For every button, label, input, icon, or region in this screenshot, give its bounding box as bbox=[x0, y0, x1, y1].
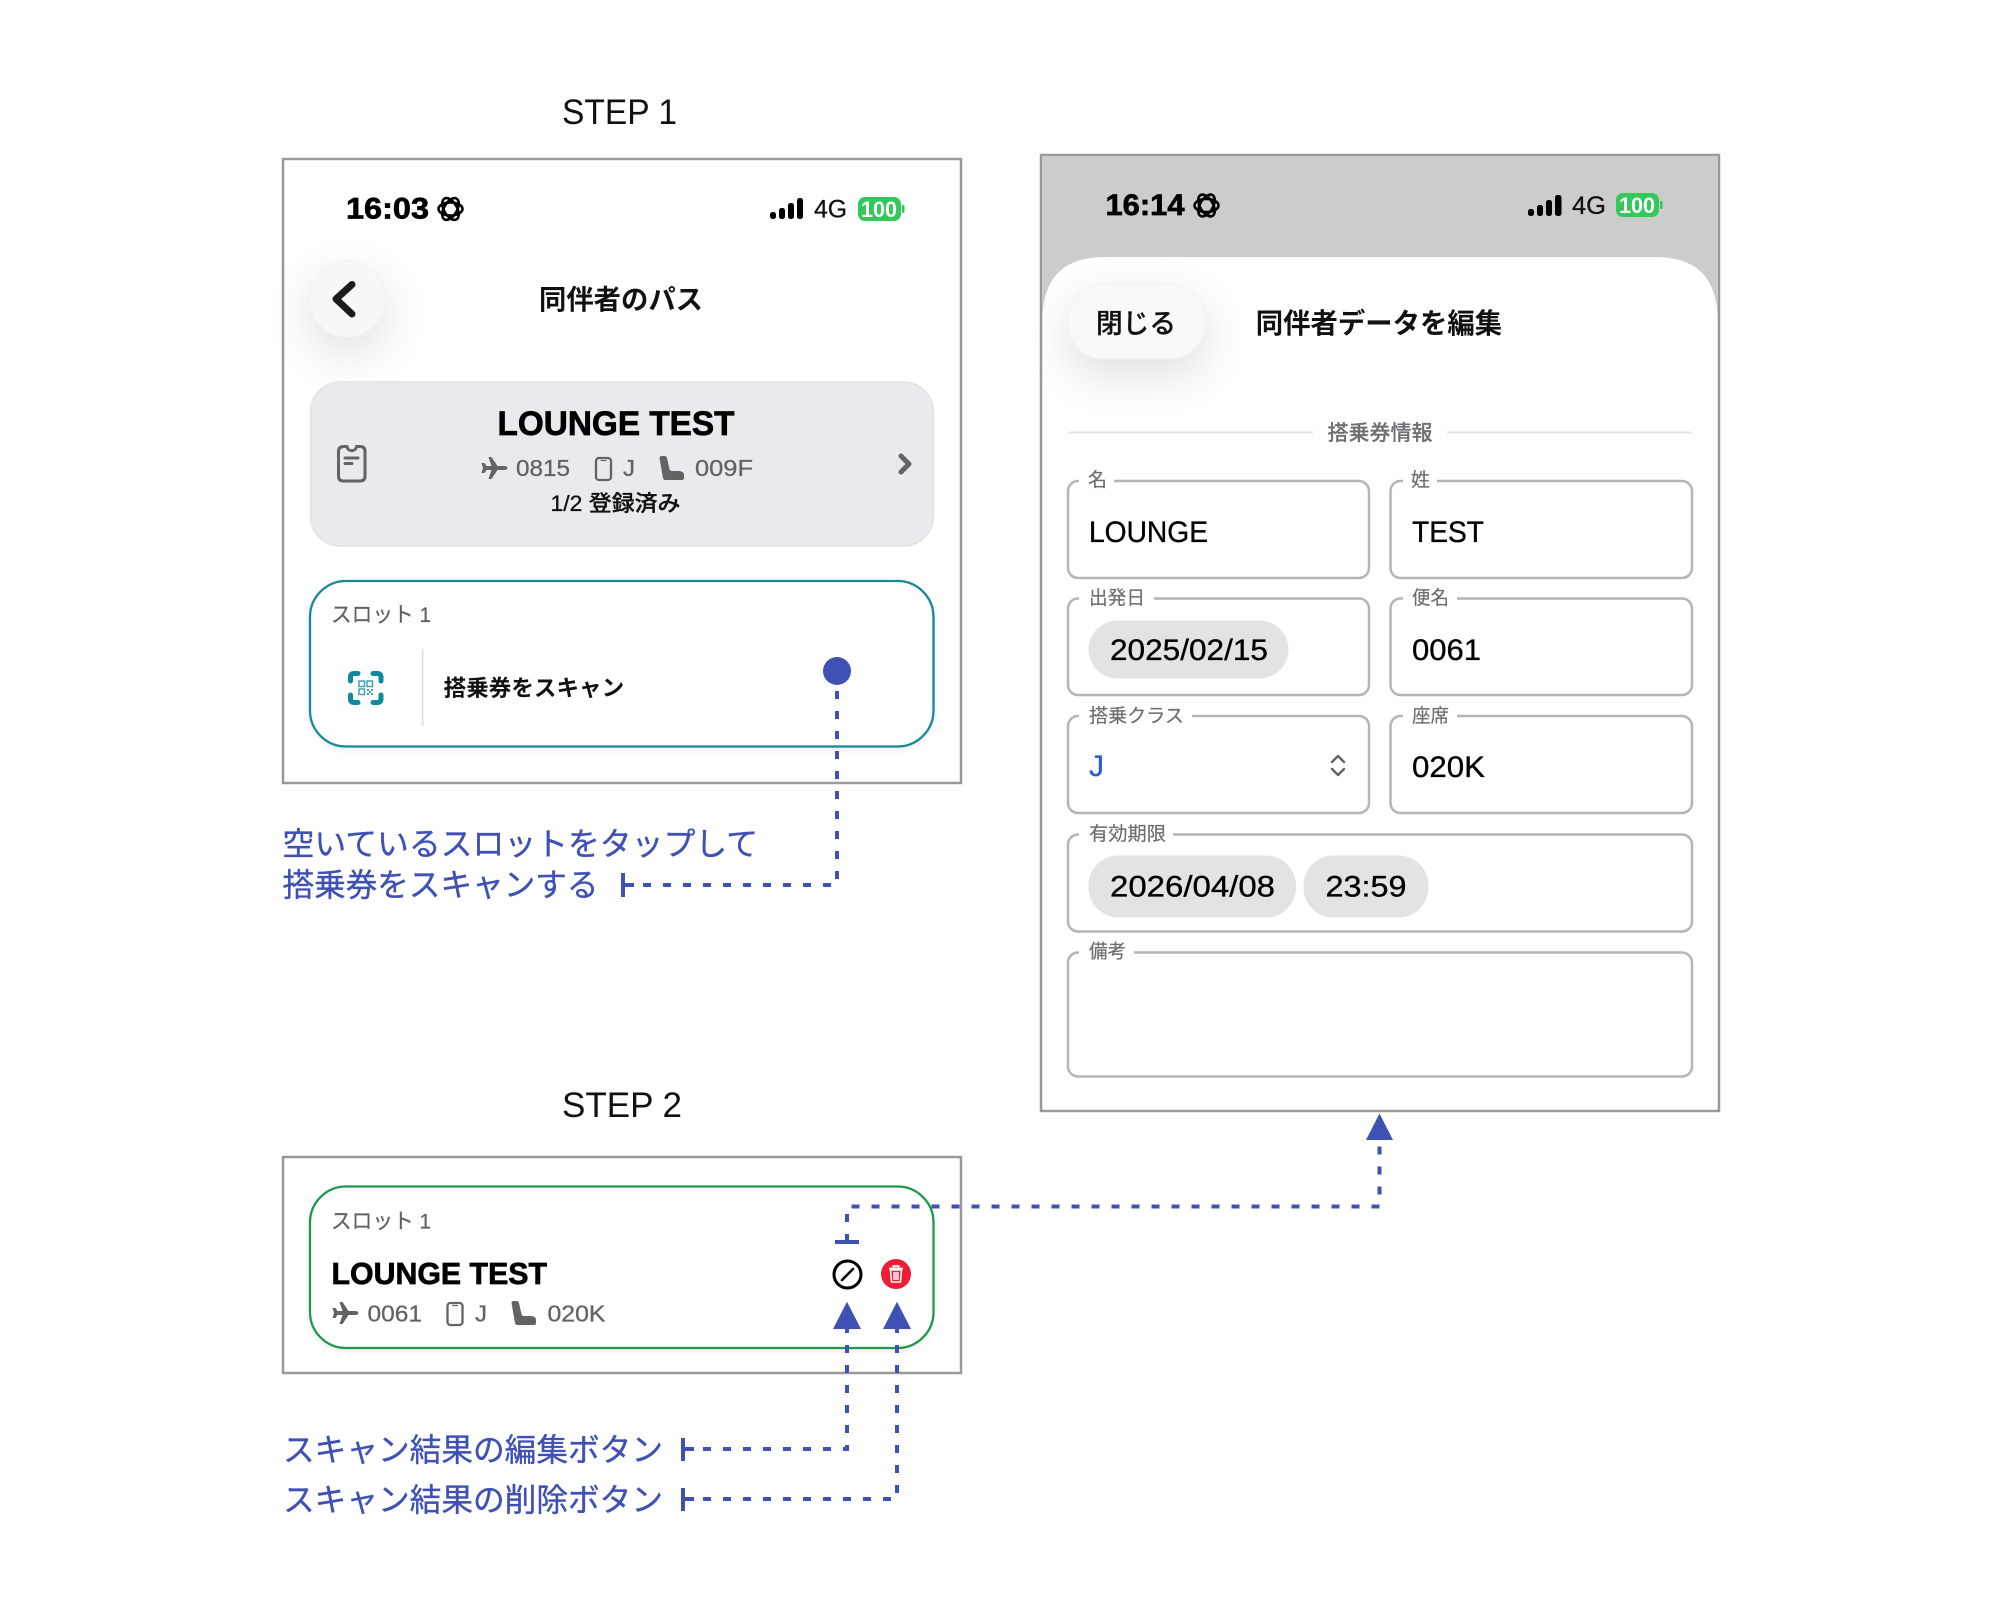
flight details: 020K bbox=[548, 1300, 606, 1326]
flight details: J bbox=[623, 455, 635, 481]
panel: edit companion data screen bbox=[1041, 155, 1719, 1111]
icon: chevron right bbox=[901, 456, 909, 472]
flight details: 0815 bbox=[516, 455, 570, 481]
callout text bbox=[282, 826, 758, 903]
field: departure date: 2025/02/15 bbox=[1110, 634, 1268, 667]
field: expiry: 2026/04/08 bbox=[1110, 870, 1275, 904]
flight details: J bbox=[475, 1300, 487, 1326]
panel: scanned slot bbox=[283, 1157, 961, 1373]
field: notes bbox=[1068, 940, 1692, 1076]
field: departure date: 出発日 bbox=[1089, 587, 1145, 609]
card: empty slot 1 bbox=[310, 581, 934, 746]
field: flight number: 便名 bbox=[1412, 587, 1449, 609]
close button: 閉じる bbox=[1096, 309, 1176, 339]
field: first name: LOUNGE bbox=[1089, 516, 1208, 549]
icon: delete button bbox=[881, 1259, 911, 1289]
icon: boarding pass bbox=[338, 446, 365, 481]
back button bbox=[310, 261, 386, 337]
status bar: 16:03 bbox=[346, 192, 429, 226]
slot label: スロット 1 bbox=[331, 1210, 431, 1234]
icon: edit button bbox=[834, 1261, 861, 1288]
field: expiry: 23:59 bbox=[1326, 870, 1406, 904]
field: first name: 名 bbox=[1088, 469, 1107, 491]
field: expiry: 有効期限 bbox=[1089, 823, 1166, 845]
field: last name: 姓 bbox=[1411, 469, 1430, 491]
scan prompt: 搭乗券をスキャン bbox=[444, 676, 624, 701]
callout: edit button label: スキャン結果の編集ボタン bbox=[283, 1432, 663, 1468]
section divider: boarding pass info: 搭乗券情報 bbox=[1328, 422, 1432, 445]
field: flight number: 0061 bbox=[1412, 634, 1481, 667]
field: first name bbox=[1068, 469, 1369, 578]
slot label: スロット 1 bbox=[331, 603, 431, 627]
icon: QR scan bbox=[350, 674, 381, 702]
heading: STEP 2: STEP 2 bbox=[562, 1086, 682, 1125]
screen title: 同伴者のパス bbox=[539, 284, 703, 315]
callout: delete button label: スキャン結果の削除ボタン bbox=[283, 1482, 663, 1518]
status bar: 100 bbox=[1619, 193, 1655, 218]
callout: tap empty slot annotation bbox=[282, 657, 851, 903]
heading: STEP 1: STEP 1 bbox=[562, 93, 677, 132]
card: filled slot 1 bbox=[310, 1186, 934, 1348]
registration status: 1/2 登録済み bbox=[550, 491, 680, 516]
status bar: 16:14 bbox=[1106, 189, 1185, 222]
arrow: delete button pointer bbox=[683, 1302, 911, 1511]
field: boarding class bbox=[1068, 705, 1369, 813]
field: expiry bbox=[1068, 823, 1692, 932]
passenger name: LOUNGE TEST bbox=[498, 405, 735, 443]
panel: passenger pass screen bbox=[283, 159, 961, 783]
status bar bbox=[1106, 189, 1662, 222]
flight details bbox=[332, 1300, 606, 1326]
callout text: 空いているスロットをタップして bbox=[282, 826, 758, 862]
card: flight summary bbox=[310, 382, 934, 546]
close button bbox=[1068, 284, 1206, 359]
passenger name: LOUNGE TEST bbox=[332, 1256, 547, 1291]
status bar: 4G bbox=[1572, 192, 1606, 220]
status bar bbox=[346, 192, 904, 226]
screen title: 同伴者データを編集 bbox=[1256, 307, 1502, 339]
field: notes: 備考 bbox=[1089, 940, 1126, 962]
field: last name: TEST bbox=[1412, 516, 1484, 549]
status bar: 100 bbox=[861, 197, 897, 222]
field: seat: 座席 bbox=[1412, 705, 1449, 727]
callout text: 搭乗券をスキャンする bbox=[282, 867, 598, 903]
field: departure date bbox=[1068, 587, 1369, 695]
field: boarding class: J bbox=[1089, 750, 1104, 783]
dimmed header bbox=[1042, 156, 1718, 320]
status bar: 4G bbox=[814, 196, 847, 224]
field: seat bbox=[1390, 705, 1692, 813]
field: flight number bbox=[1390, 587, 1692, 695]
arrow: edit button to edit screen bbox=[835, 1114, 1393, 1242]
arrow: edit button pointer bbox=[683, 1302, 861, 1461]
flight details: 009F bbox=[695, 455, 753, 481]
flight details: 0061 bbox=[368, 1300, 422, 1326]
field: seat: 020K bbox=[1412, 751, 1485, 784]
field: boarding class: 搭乗クラス bbox=[1089, 705, 1184, 727]
field: last name bbox=[1390, 469, 1692, 578]
flight details bbox=[482, 455, 753, 481]
